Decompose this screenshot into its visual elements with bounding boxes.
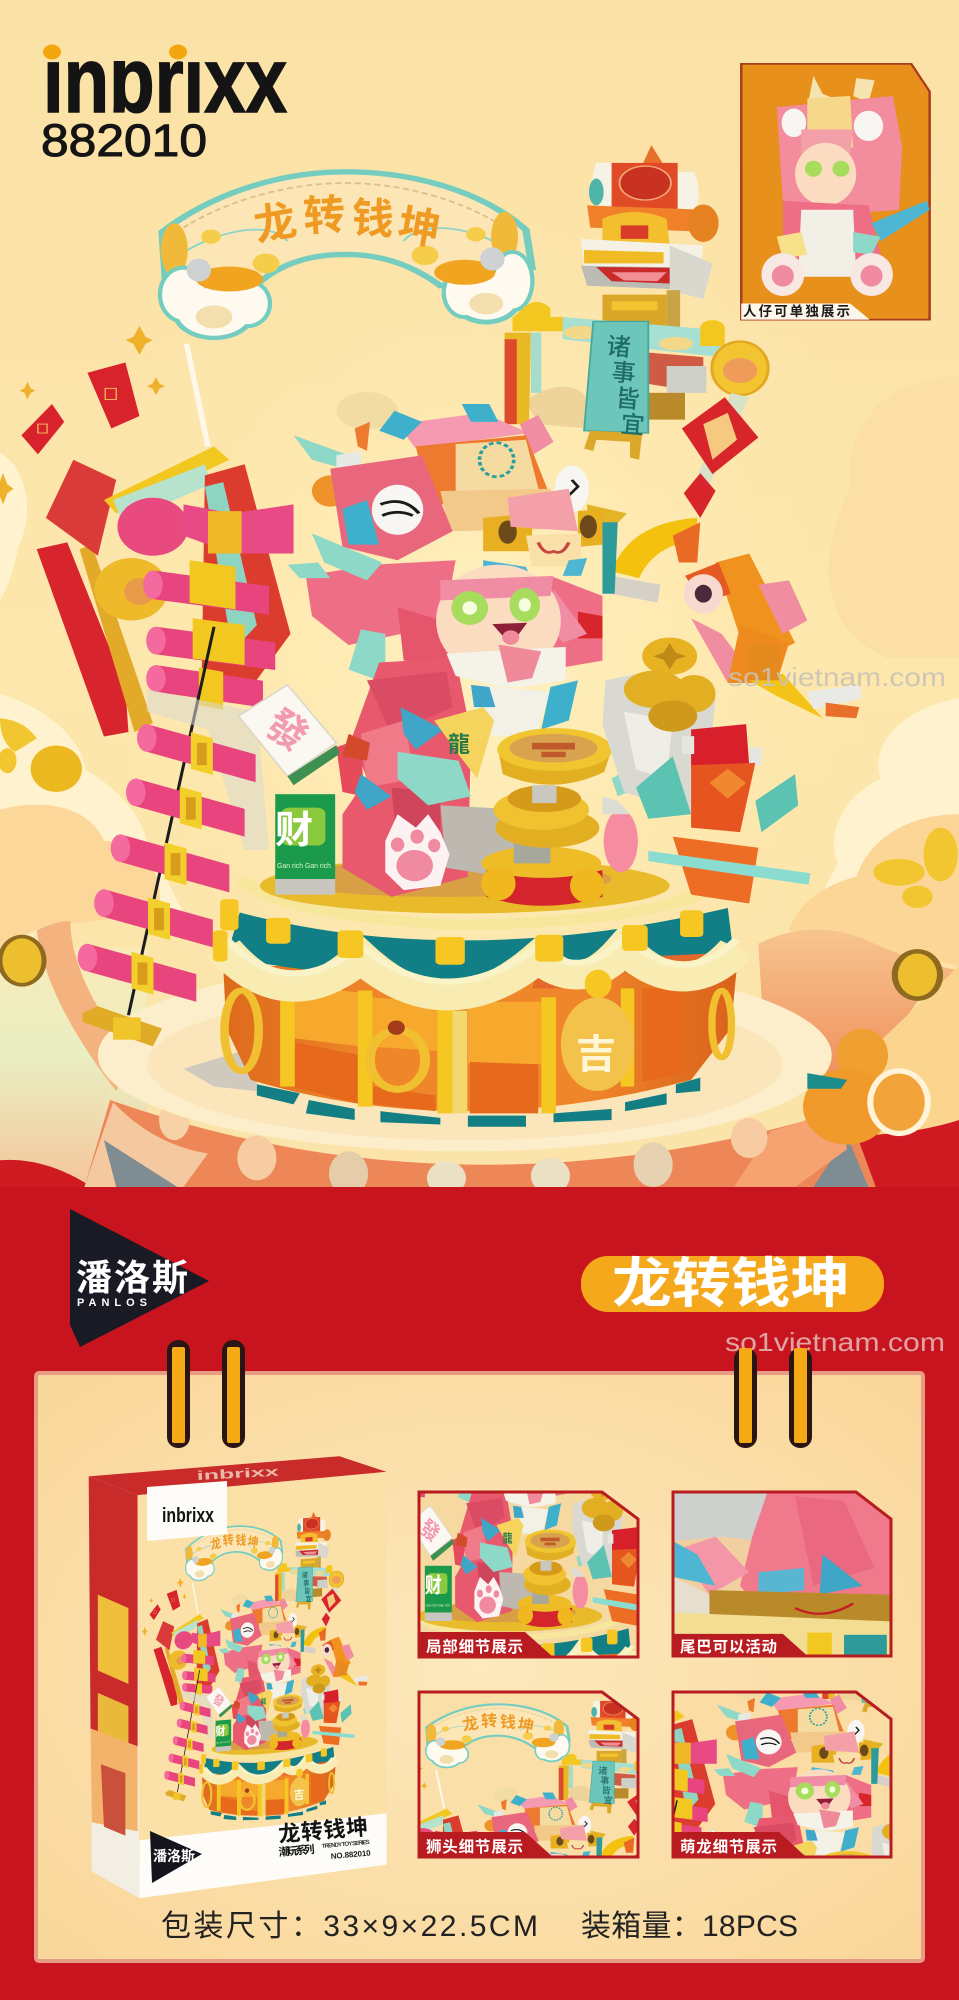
logo: inbrixx bbox=[43, 44, 288, 114]
green fortune card and mahjong tile: 發 bbox=[258, 701, 315, 760]
product box bbox=[89, 1456, 387, 1898]
thumbnail: tail can move: 尾巴可以活动 bbox=[680, 1638, 777, 1656]
box badge: 潘洛斯 bbox=[153, 1848, 195, 1864]
model base: orange drum: 吉 bbox=[576, 1033, 616, 1077]
box title: TRENDY TOY SERIES bbox=[322, 1840, 370, 1850]
goldfish lantern and side ornaments bbox=[602, 554, 862, 904]
model number: 882010 bbox=[41, 115, 207, 166]
box title: 潮玩系列 bbox=[278, 1842, 315, 1859]
inset: figure alone: 人仔可单独展示 bbox=[743, 304, 850, 319]
box badge bbox=[150, 1831, 202, 1883]
lion head ornament bbox=[581, 145, 719, 330]
logo: inbrixx: inbrixx bbox=[43, 28, 287, 132]
package size spec: 包装尺寸：33×9×22.5CM bbox=[161, 1910, 538, 1943]
box art: mini model bbox=[142, 1508, 368, 1829]
firecracker string with red frame bbox=[37, 446, 294, 1046]
inset: figure alone bbox=[741, 64, 930, 320]
background: upper scene bbox=[0, 0, 959, 1196]
brand badge: Panlos bbox=[70, 1209, 209, 1347]
thumbnail: cute dragon detail: 萌龙细节展示 bbox=[680, 1838, 777, 1856]
model base: orange drum bbox=[213, 858, 737, 1127]
details panel bbox=[36, 1373, 923, 1961]
thumbnail: lion head detail bbox=[418, 1690, 640, 1858]
red envelopes and sparkles bbox=[0, 326, 165, 504]
thumbnail: cute dragon detail bbox=[672, 1690, 892, 1858]
box logo tab: inbrixx bbox=[162, 1505, 214, 1527]
gold coin stack bbox=[481, 728, 612, 906]
green fortune card and mahjong tile: 财 bbox=[275, 810, 313, 852]
product model scene bbox=[0, 145, 862, 1127]
thumbnail: local detail: 局部细节展示 bbox=[426, 1637, 523, 1656]
product name pill: 龙转钱坤 bbox=[612, 1254, 850, 1314]
box title: NO.882010 bbox=[330, 1848, 372, 1861]
watermark: lower: so1vietnam.com bbox=[725, 1327, 945, 1357]
banner: arch: 龙转钱坤 bbox=[250, 191, 444, 254]
hanging frame with scroll bbox=[505, 302, 768, 603]
watermark: upper: so1vietnam.com bbox=[728, 662, 946, 692]
thumbnail: local detail bbox=[418, 1490, 640, 1658]
brand badge: Panlos: 潘洛斯 bbox=[76, 1257, 188, 1298]
lower red section bbox=[0, 1187, 959, 2000]
hanging frame with scroll: 诸事皆宜 bbox=[605, 333, 646, 440]
box faces bbox=[89, 1456, 387, 1898]
brand badge: Panlos: PANLOS bbox=[77, 1297, 147, 1309]
box logo tab bbox=[147, 1481, 227, 1541]
green fortune card and mahjong tile: Gan rich Gan rich bbox=[277, 863, 331, 870]
box top logo: inbrixx bbox=[196, 1464, 281, 1483]
green fortune card and mahjong tile: 龍 bbox=[448, 732, 470, 757]
banner: arch bbox=[158, 172, 535, 446]
thumbnail: lion head detail: 狮头细节展示 bbox=[426, 1838, 523, 1856]
thumbnail: tail can move bbox=[673, 1492, 891, 1657]
dragon figure bbox=[287, 392, 639, 897]
box title bbox=[277, 1814, 372, 1861]
green fortune card and mahjong tile bbox=[239, 685, 470, 895]
box title: 龙转钱坤 bbox=[277, 1814, 369, 1847]
carton quantity spec: 装箱量：18PCS bbox=[581, 1910, 798, 1943]
gold coins, ingots and oranges bbox=[0, 718, 958, 1145]
hanging hooks bbox=[167, 1340, 812, 1448]
